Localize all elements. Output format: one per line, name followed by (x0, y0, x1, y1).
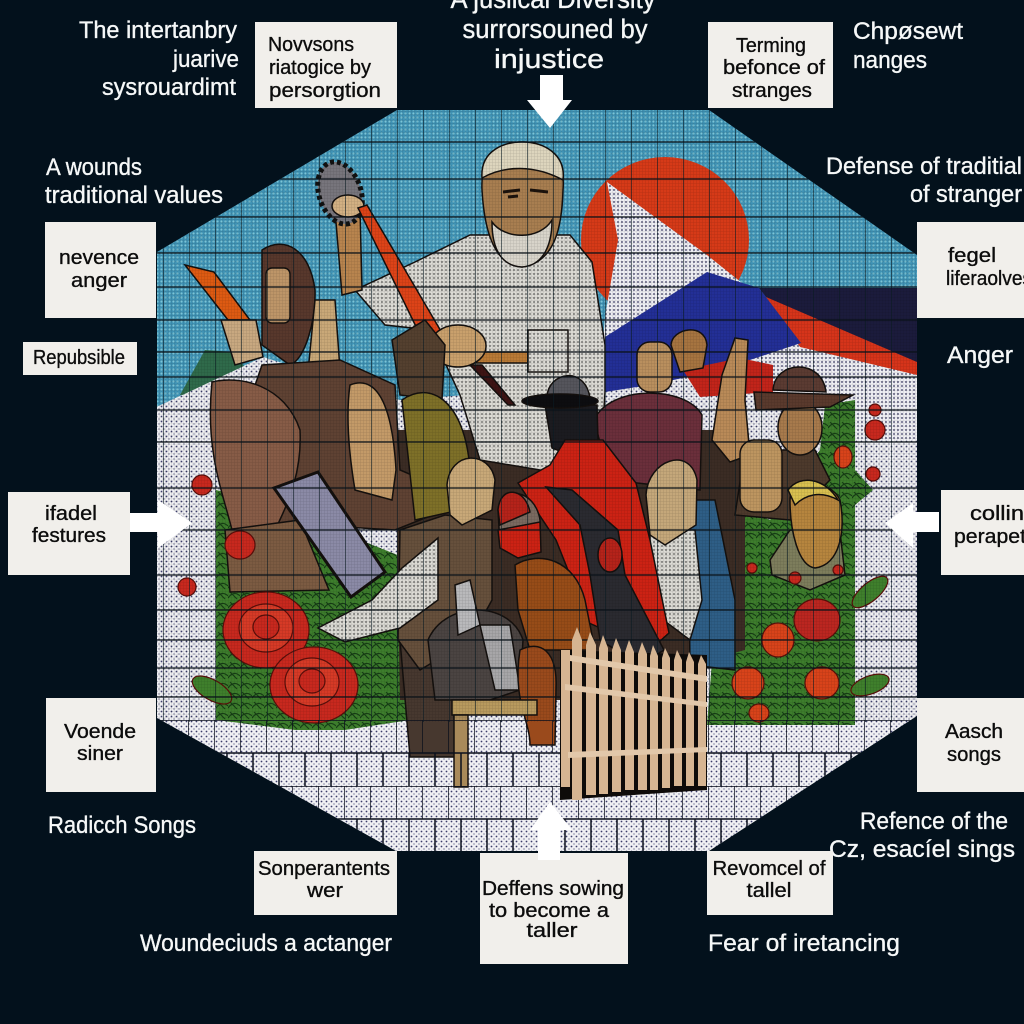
bright bed one (747, 563, 757, 573)
red mask (498, 522, 541, 558)
box: left upper: nevence (59, 247, 139, 269)
red circle flag (581, 157, 760, 380)
wooden stick (474, 351, 527, 364)
tesserae texture (157, 110, 917, 722)
text: bottom left caption: Woundeciuds a actanger (140, 930, 392, 957)
bright bed three (833, 565, 843, 575)
fence shadow (560, 650, 707, 800)
text: top left caption (79, 17, 239, 101)
box: bottom centre: to become a (489, 900, 610, 922)
grid columns (157, 110, 917, 722)
red pennant (766, 297, 917, 375)
arrow: left (130, 500, 192, 548)
arrow: top (527, 75, 572, 128)
tomato three (805, 667, 839, 699)
text: bottom right caption: Fear of iretancing (708, 930, 900, 957)
text: lower right caption: Refence of the (860, 808, 1008, 835)
distant trees (180, 350, 244, 395)
box: bottom left: Sonperantents (258, 858, 390, 880)
red bud two (865, 420, 885, 440)
bench seat (452, 700, 537, 715)
small rose outer (192, 475, 212, 495)
hand on chainsaw (332, 195, 364, 217)
arrow: right (885, 503, 939, 548)
garden left (216, 490, 410, 730)
leaf left (188, 670, 236, 710)
sky (150, 105, 925, 415)
box: bottom right (707, 851, 833, 915)
leaf right (847, 571, 893, 613)
black hat crown (547, 376, 590, 398)
backfill behind figures (395, 430, 745, 700)
box: bottom left (254, 851, 397, 915)
box: top left: Novvsons (268, 34, 354, 56)
raised tan arm (308, 299, 340, 362)
book or cup (274, 472, 385, 597)
text: top left caption: juarive (172, 46, 239, 73)
box: right lower: Aasch (945, 721, 1003, 743)
box: left lower: siner (77, 743, 123, 765)
orange kite (185, 265, 250, 320)
brown robe (400, 620, 455, 757)
vest man head (447, 458, 495, 525)
text: lower right caption (829, 808, 1015, 863)
figures upper group (185, 142, 605, 480)
maroon figure (594, 393, 702, 490)
text: top right caption: nanges (853, 47, 927, 74)
box: right middle (941, 490, 1024, 575)
box: left upper: anger (71, 270, 127, 292)
cuff (528, 330, 568, 372)
olive figure (402, 393, 470, 520)
orange jacket (515, 558, 595, 650)
box: top right: Terming (736, 35, 806, 57)
mosaic panel: central octagon (150, 105, 925, 860)
box: republisble (23, 342, 137, 375)
masked head hood (498, 493, 540, 558)
box: bottom centre: Deffens sowing (482, 878, 624, 900)
hat brim (754, 392, 853, 410)
blue robe (688, 500, 735, 670)
title (450, 0, 656, 74)
box: bottom right: tallel (746, 880, 792, 902)
hat crown (773, 367, 826, 392)
text: right upper caption (826, 153, 1022, 208)
black hat brim (522, 394, 598, 408)
tan kite tail (221, 320, 263, 365)
leaf right low (848, 670, 892, 700)
horse (210, 380, 300, 530)
box: top right (708, 22, 833, 108)
box: left lower (46, 698, 156, 792)
tomato four (749, 704, 769, 722)
grey seated figure (428, 610, 523, 700)
box: bottom centre: taller (526, 920, 578, 942)
pale cloth (455, 580, 480, 635)
blond figure shirt (770, 530, 845, 590)
brown torso (254, 359, 426, 531)
box: left middle: ifadel (45, 503, 97, 525)
mask face (545, 405, 598, 455)
brick rows of ground (157, 720, 917, 855)
text: top right caption: Chpøsewt (853, 18, 963, 45)
bright bed two (789, 572, 801, 584)
box: left upper (45, 222, 156, 318)
maroon figure head (637, 342, 672, 392)
box: top left: riatogice by (269, 57, 371, 79)
tan arm (348, 383, 396, 500)
woman face (266, 268, 290, 323)
flowers (178, 404, 893, 723)
elderly man head (482, 142, 563, 267)
box: right upper (917, 222, 1024, 318)
raised forearm (712, 338, 750, 462)
rose left lower (270, 647, 358, 723)
woman hair (262, 244, 315, 365)
wooden fence (560, 627, 707, 800)
text: right upper caption: Defense of traditial (826, 153, 1022, 180)
brow and eye (503, 190, 548, 197)
navy band (759, 288, 917, 365)
long dark blade (470, 365, 515, 405)
figures mid group (210, 244, 853, 530)
box: bottom right: Revomcel of (712, 858, 826, 880)
white shirt piece (480, 625, 520, 690)
blond hair (788, 480, 838, 505)
wooden bench pile (225, 520, 329, 592)
figures lower group (225, 440, 845, 787)
box: left lower: Voende (64, 721, 136, 743)
blond figure head (790, 484, 842, 568)
text: right upper caption: of stranger (910, 181, 1022, 208)
arrow: bottom (530, 802, 572, 860)
text: left upper caption (45, 154, 223, 209)
box: republisble: Repubsible (33, 347, 125, 369)
hat man face (778, 401, 822, 455)
old man head (646, 460, 697, 545)
chainsaw blade (315, 159, 365, 227)
box: bottom centre (480, 853, 628, 964)
red bud one (869, 404, 881, 416)
hat man body (735, 450, 830, 520)
box: right lower (917, 698, 1024, 792)
rose left large (223, 592, 309, 668)
box: right middle: perapet (954, 526, 1024, 548)
box: top left: persorgtion (269, 80, 381, 102)
flower cluster (178, 578, 196, 596)
white ground wedge left (162, 359, 258, 404)
elderly man body (355, 235, 605, 480)
beard (492, 220, 552, 267)
red headscarf (498, 492, 530, 525)
small rose (225, 531, 255, 559)
vest man vest (398, 515, 492, 670)
box: bottom left: wer (306, 880, 343, 902)
box: top right: stranges (732, 80, 812, 102)
bench leg (454, 715, 468, 787)
text: radich songs: Radicch Songs (48, 812, 196, 839)
text: lower right caption: Cz, esacíel sings (829, 836, 1015, 863)
right person tan torso (740, 440, 782, 512)
tomato two (732, 667, 764, 699)
white shirt old man (650, 530, 702, 640)
rose right (794, 599, 840, 641)
box: top left (255, 22, 397, 108)
text: anger: Anger (947, 342, 1013, 369)
pickets (561, 627, 706, 800)
blue tent (605, 272, 801, 392)
red hand (598, 538, 622, 572)
text: top left caption: sysrouardimt (102, 74, 236, 101)
garden right (707, 400, 873, 725)
chainsaw handle (357, 204, 440, 332)
tomato one (762, 623, 794, 657)
hat figure rear (392, 320, 445, 400)
grid rows (157, 142, 917, 697)
box: left middle (8, 492, 130, 575)
box: left middle: festures (32, 525, 106, 547)
box: top right: befonce of (723, 57, 825, 79)
red cloak (518, 440, 669, 650)
tomato upper (834, 446, 852, 468)
text: top right caption (853, 18, 963, 74)
box: right lower: songs (947, 744, 1001, 766)
fence rails (565, 655, 707, 758)
black cloak (546, 487, 664, 665)
box: right upper: fegel (948, 245, 996, 267)
white tent field (756, 344, 917, 440)
ground (150, 357, 925, 860)
bald head top (482, 142, 563, 180)
text: top left caption: The intertanbry (79, 17, 237, 44)
red cloth under tent (683, 358, 773, 397)
box: right middle: collin (970, 503, 1024, 525)
orange leg (518, 646, 556, 745)
vest man white arm (318, 538, 438, 642)
title: injustice (494, 44, 604, 74)
text: left upper caption: traditional values (45, 182, 223, 209)
title: surrorsouned by (462, 14, 648, 44)
second head (671, 330, 707, 372)
raised arm (335, 208, 362, 295)
text: left upper caption: A wounds (46, 154, 142, 181)
gripping hand (430, 325, 486, 367)
red bud three (866, 467, 880, 481)
